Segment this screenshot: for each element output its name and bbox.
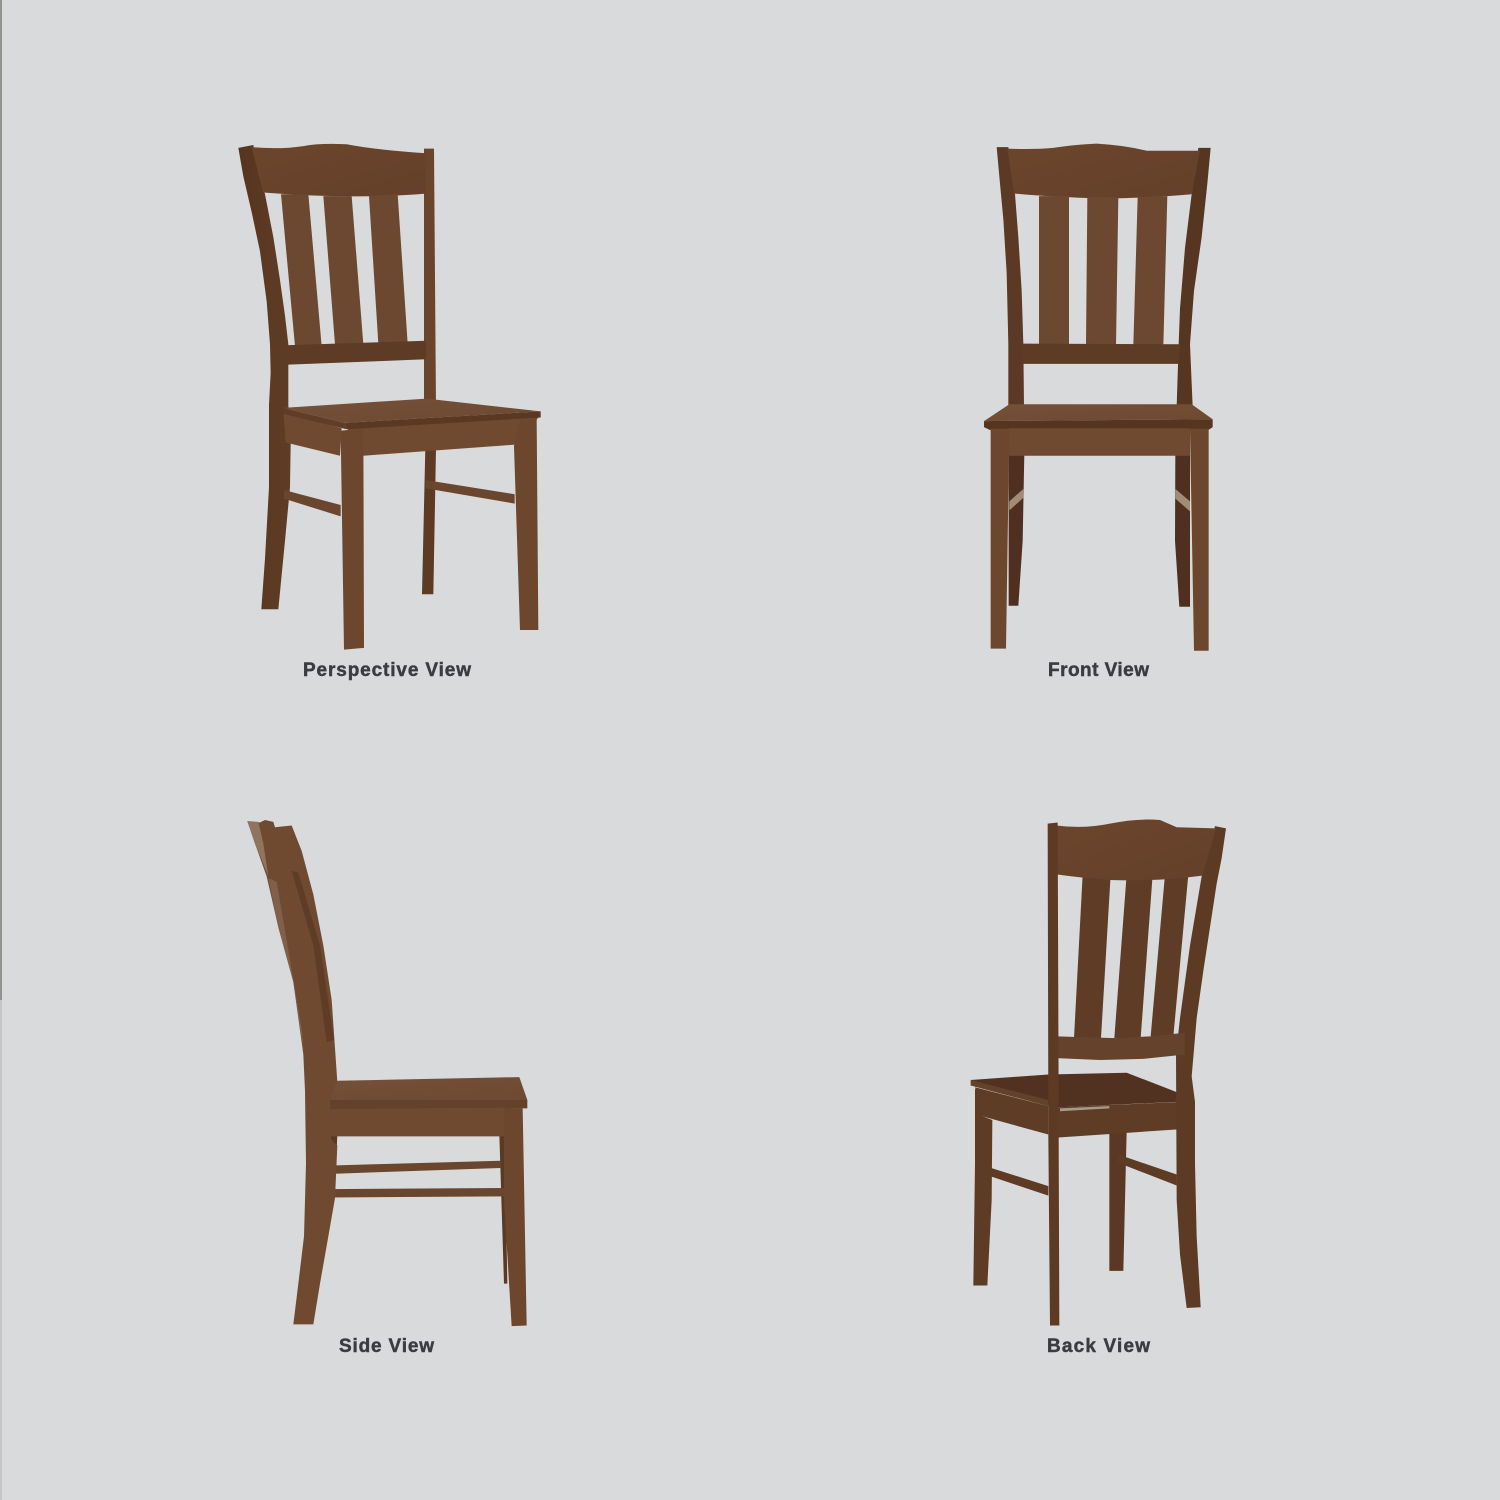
chair: back view xyxy=(971,820,1226,1325)
seat xyxy=(283,399,541,423)
top rail xyxy=(1057,820,1216,880)
far leg sliver xyxy=(499,1135,507,1284)
light seat sliver xyxy=(1060,1106,1109,1111)
slats xyxy=(1039,196,1167,345)
apron xyxy=(1008,428,1190,456)
seat xyxy=(971,1073,1178,1107)
far leg xyxy=(1109,1131,1127,1271)
slats xyxy=(281,194,408,346)
light top edge xyxy=(247,821,268,876)
top rail xyxy=(1007,144,1200,199)
seat xyxy=(984,404,1213,421)
left rear post and leg xyxy=(238,145,291,609)
right post xyxy=(424,149,436,409)
apron xyxy=(283,412,541,456)
apron xyxy=(330,1108,505,1136)
back legs xyxy=(1009,453,1190,607)
apron xyxy=(975,1087,1182,1137)
left leg xyxy=(973,1089,992,1285)
chair: side view xyxy=(247,820,527,1326)
chair: front view xyxy=(984,144,1213,651)
top rail xyxy=(252,144,426,196)
label: Back View: Back View xyxy=(1047,1336,1150,1357)
lower rail xyxy=(1022,344,1181,364)
label: Perspective View: Perspective View xyxy=(303,660,471,681)
label: Front View: Front View xyxy=(1048,660,1149,681)
right post and leg xyxy=(1176,826,1226,1308)
front legs xyxy=(991,429,1009,649)
stretchers xyxy=(983,1155,1177,1196)
label: Side View: Side View xyxy=(339,1336,434,1357)
back and rear leg xyxy=(247,820,337,1324)
chair: perspective view xyxy=(238,144,541,650)
stretchers xyxy=(284,480,515,516)
back right leg xyxy=(422,448,436,594)
near post and leg xyxy=(1048,823,1059,1325)
lighter slat edge xyxy=(268,878,304,1055)
lower rail xyxy=(1057,1033,1185,1060)
back slat shadow xyxy=(292,871,334,1042)
lower rail xyxy=(282,341,426,365)
stretchers xyxy=(328,1161,505,1197)
posts xyxy=(997,147,1024,407)
slats xyxy=(1074,875,1188,1038)
stretchers xyxy=(1009,489,1190,511)
front legs xyxy=(341,428,364,650)
front leg xyxy=(504,1108,527,1326)
seat xyxy=(330,1077,527,1100)
